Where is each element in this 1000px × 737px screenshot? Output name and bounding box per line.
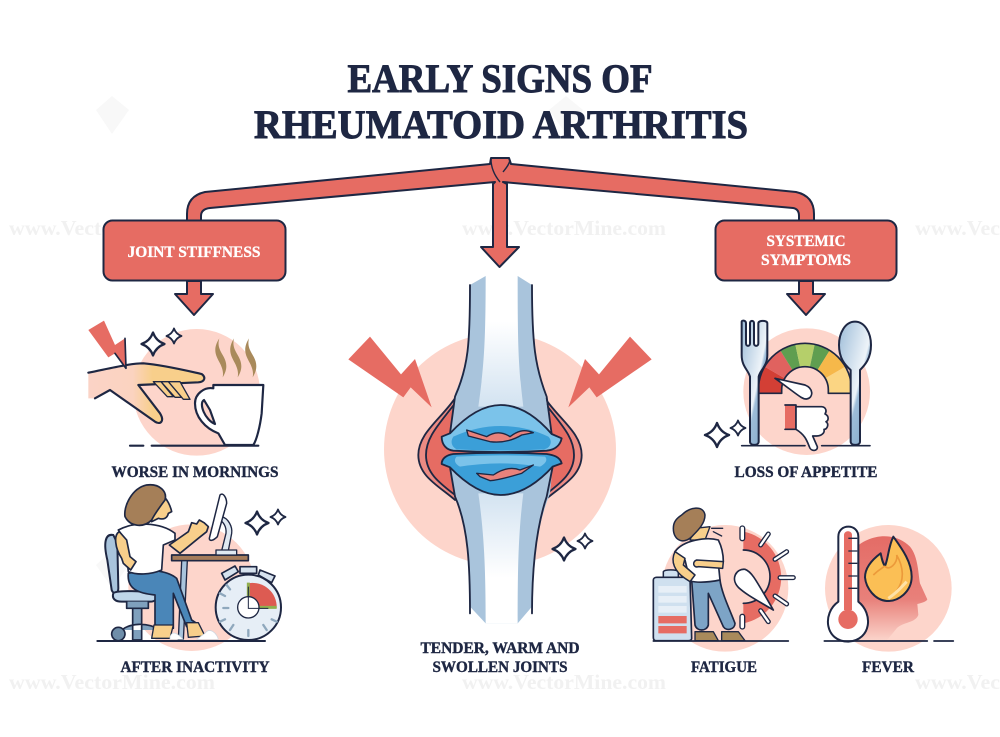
arrow: systemic symptoms down: [787, 281, 825, 315]
label: loss of appetite: LOSS OF APPETITE: [734, 464, 878, 481]
watermark: www.VectorMine.com: [9, 216, 216, 240]
label: tender, warm and swollen joints: SWOLLEN JOINTS: [432, 659, 568, 676]
panel: joint stiffness box: [104, 220, 286, 280]
watermark: www.VectorMine.com: [9, 670, 216, 694]
sparkles: joint: [552, 534, 592, 560]
panel: systemic symptoms box: SYMPTOMS: [761, 252, 851, 269]
watermark: www.VectorMine.com: [462, 670, 667, 694]
icon: fever head with thermometer: [824, 525, 953, 652]
label: fever: FEVER: [862, 659, 914, 676]
sparkles: person: [246, 510, 286, 534]
title: EARLY SIGNS OF: [348, 56, 652, 101]
label: after inactivity: AFTER INACTIVITY: [120, 659, 270, 676]
arrow: joint stiffness down: [175, 281, 213, 315]
sparkles: hand: [142, 328, 182, 356]
icon: person at desk with stopwatch: [97, 485, 281, 651]
label: tender, warm and swollen joints: [420, 640, 580, 676]
icon: inflamed joint: [348, 276, 652, 623]
sparkles: appetite: [705, 420, 746, 447]
panel: systemic symptoms box: SYSTEMIC: [766, 233, 846, 250]
icon: fatigue person with battery and gauge: [653, 508, 793, 652]
panel: systemic symptoms box: [716, 220, 896, 280]
label: fatigue: FATIGUE: [691, 659, 757, 676]
icon: hand and coffee: [88, 321, 263, 456]
icon: appetite gauge with cutlery: [742, 321, 871, 455]
label: worse in mornings: WORSE IN MORNINGS: [112, 464, 279, 481]
panel: joint stiffness box: JOINT STIFFNESS: [128, 244, 260, 261]
title: [254, 56, 748, 147]
label: tender, warm and swollen joints: TENDER, WARM AND: [420, 640, 580, 657]
watermark: www.VectorMine.com: [462, 216, 667, 240]
branching arrow connector: [187, 158, 814, 267]
title: RHEUMATOID ARTHRITIS: [254, 102, 748, 147]
